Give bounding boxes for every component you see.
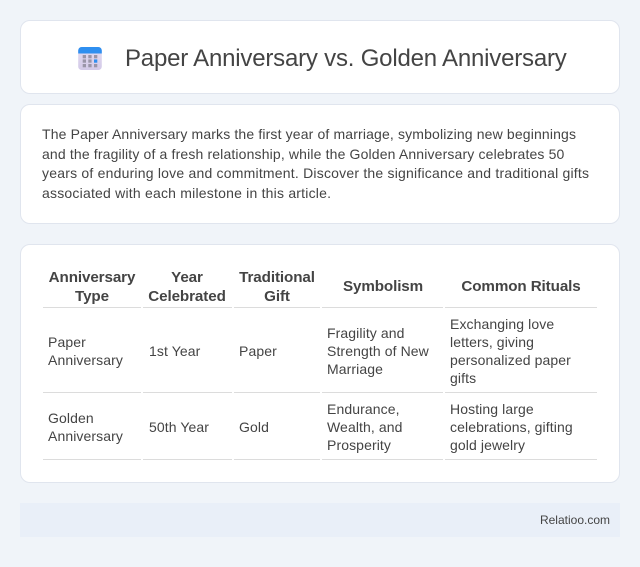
row: golden anniversary: Hosting large xyxy=(450,401,534,417)
row: golden anniversary: Prosperity xyxy=(327,437,391,453)
row: paper anniversary xyxy=(48,316,571,386)
intro paragraph xyxy=(42,126,589,201)
intro text panel: associated with each milestone in this article. xyxy=(42,185,331,201)
row: paper anniversary: Anniversary xyxy=(48,352,123,368)
row: golden anniversary: gold jewelry xyxy=(450,437,525,453)
table header: Gift xyxy=(264,288,290,305)
table header xyxy=(49,269,581,305)
icon: calendar xyxy=(78,47,102,70)
table header: Type xyxy=(75,288,109,305)
row: golden anniversary: Golden xyxy=(48,410,94,426)
row: paper anniversary: Paper xyxy=(48,334,86,350)
table header: Celebrated xyxy=(148,288,226,305)
table header: Year xyxy=(171,269,203,286)
row: paper anniversary: Strength of New xyxy=(327,343,429,359)
table header: Symbolism xyxy=(343,278,423,295)
intro text panel: years of enduring love and commitment. Discover the significance and traditional gifts xyxy=(42,165,589,181)
row: paper anniversary: Paper xyxy=(239,343,277,359)
table header: Anniversary xyxy=(49,269,135,286)
title panel xyxy=(20,20,620,94)
footer bar xyxy=(20,503,620,537)
row: golden anniversary: celebrations, gifting xyxy=(450,419,573,435)
row: golden anniversary: Anniversary xyxy=(48,428,123,444)
row: paper anniversary: Exchanging love xyxy=(450,316,554,332)
table header: Common Rituals xyxy=(461,278,581,295)
row: paper anniversary: Fragility and xyxy=(327,325,405,341)
row: golden anniversary: 50th Year xyxy=(149,419,209,435)
row: paper anniversary: letters, giving xyxy=(450,334,534,350)
row: golden anniversary xyxy=(48,401,573,453)
row: paper anniversary: 1st Year xyxy=(149,343,200,359)
intro text panel: The Paper Anniversary marks the first year of marriage, symbolizing new beginnings xyxy=(42,126,576,142)
footer credit: Relatioo.com xyxy=(540,513,610,527)
row: golden anniversary: Endurance, xyxy=(327,401,400,417)
row: paper anniversary: personalized paper xyxy=(450,352,571,368)
row: paper anniversary: gifts xyxy=(450,370,476,386)
comparison table panel xyxy=(20,244,620,483)
table header: Traditional xyxy=(239,269,315,286)
row: golden anniversary: Gold xyxy=(239,419,269,435)
comparison table xyxy=(43,269,597,460)
row: golden anniversary: Wealth, and xyxy=(327,419,403,435)
intro text panel xyxy=(20,104,620,224)
heading: Paper Anniversary vs. Golden Anniversary xyxy=(125,45,567,72)
row: paper anniversary: Marriage xyxy=(327,361,383,377)
intro text panel: and the fragility of a fresh relationship, while the Golden Anniversary celebrates 50 xyxy=(42,146,564,162)
